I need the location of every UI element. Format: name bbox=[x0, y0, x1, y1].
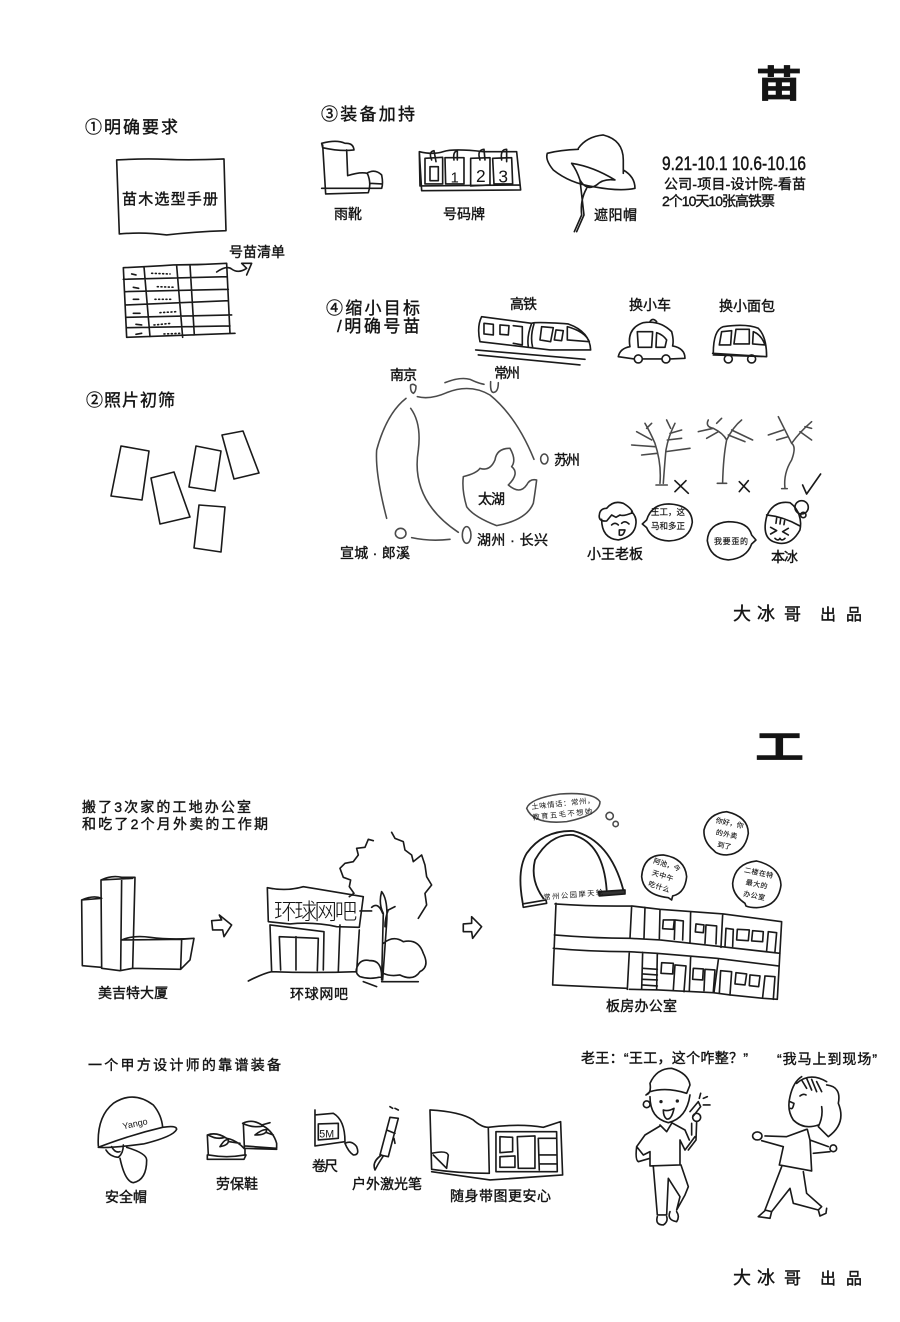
callout: boss Wang with speech bubble bbox=[587, 502, 692, 562]
text block: dates and itinerary: 9.21-10.1 10.6-10.16 bbox=[662, 154, 806, 175]
icon: high speed train: 高铁 bbox=[510, 296, 537, 312]
illustration: designer rushing to site bbox=[753, 1051, 877, 1218]
icon: laser pointer: 户外激光笔 bbox=[352, 1176, 422, 1192]
icon: safety helmet: 安全帽 bbox=[105, 1189, 147, 1205]
icon: sun hat: 遮阳帽 bbox=[594, 207, 637, 223]
icon: safety helmet: Yango bbox=[122, 1116, 149, 1131]
chart: seedling list table bbox=[123, 244, 285, 337]
signature: 哥 bbox=[784, 605, 801, 624]
icon: plant selection handbook bbox=[117, 159, 226, 235]
icon: safety shoes bbox=[207, 1121, 277, 1192]
panel: construction section 工 bbox=[82, 728, 877, 1288]
icon: three candidate trees bbox=[632, 417, 821, 494]
icon: drawings booklet bbox=[430, 1110, 563, 1204]
signature: 品 bbox=[846, 607, 862, 624]
icon: number plates: 1 bbox=[451, 171, 459, 187]
signature bbox=[733, 604, 862, 624]
icon: tape measure: 卷尺 bbox=[312, 1158, 338, 1174]
heading: step 2: ②照片初筛 bbox=[86, 391, 175, 410]
illustration: designer rushing to site: “我马上到现场” bbox=[777, 1051, 877, 1067]
icon: small van: 换小面包 bbox=[719, 298, 775, 314]
icon: number plates: 2 bbox=[476, 166, 486, 186]
callout: boss Wang with speech bubble: 马和多正 bbox=[651, 521, 685, 531]
chart: route map around Taihu: 苏州 bbox=[554, 452, 580, 468]
signature: 出 bbox=[820, 606, 836, 624]
heading: step 4: ④缩小目标 bbox=[326, 299, 420, 318]
callout: speech bubble lunch: 吃什么 bbox=[647, 879, 671, 894]
callout: boss Wang with speech bubble: 小王老板 bbox=[587, 546, 643, 562]
icon: high speed train bbox=[476, 296, 591, 365]
callout: speech bubble takeout: 到了 bbox=[717, 841, 732, 851]
icon: tape measure bbox=[312, 1110, 358, 1174]
icon: tape measure: 5M bbox=[319, 1128, 334, 1140]
callout: speech bubble biggest office: 二楼在特 bbox=[743, 865, 774, 880]
icon: rain boots bbox=[322, 141, 382, 222]
illustration: Lao Wang on the phone bbox=[581, 1050, 748, 1225]
heading: step 4 bbox=[326, 299, 420, 336]
text block: offices intro: 和吃了2个月外卖的工作期 bbox=[82, 816, 268, 832]
heading: designer gear: 一个甲方设计师的靠谱装备 bbox=[88, 1057, 281, 1073]
icon: number plates bbox=[419, 149, 521, 222]
icon: Ferris wheel arch with thought bubble: 教育五毛不想她 bbox=[532, 807, 593, 822]
signature: 冰 bbox=[757, 604, 775, 624]
chart: route map around Taihu: 湖州 · 长兴 bbox=[477, 532, 548, 548]
title: 工: 工 bbox=[755, 728, 804, 766]
arrow bbox=[463, 917, 482, 938]
signature: 冰 bbox=[757, 1268, 775, 1288]
title: 苗: 苗 bbox=[756, 63, 802, 105]
icon: scattered photos bbox=[111, 431, 259, 552]
icon: small van bbox=[713, 298, 775, 363]
callout: speech bubble takeout bbox=[704, 812, 748, 855]
signature: 品 bbox=[846, 1271, 862, 1288]
callout: Benbing with speech bubble bbox=[707, 501, 808, 565]
callout: speech bubble biggest office: 最大的 bbox=[745, 877, 768, 891]
callout: speech bubble biggest office: 办公室 bbox=[743, 889, 766, 902]
icon: internet cafe: 环球网吧 bbox=[290, 986, 348, 1002]
chart: route map around Taihu: 南京 bbox=[390, 367, 417, 383]
icon: sun hat bbox=[547, 135, 637, 232]
callout: Benbing with speech bubble: 我要歪的 bbox=[714, 536, 748, 546]
signature bbox=[733, 1268, 862, 1288]
text block: offices intro bbox=[82, 799, 268, 832]
illustration: Lao Wang on the phone: 老王：“王工，这个咋整？” bbox=[581, 1050, 748, 1066]
icon: internet cafe: 环球网吧 bbox=[274, 898, 357, 924]
text block: dates and itinerary bbox=[662, 154, 806, 209]
icon: Ferris wheel arch with thought bubble: 土味情话：常州， bbox=[531, 796, 595, 811]
signature: 大 bbox=[733, 604, 751, 624]
icon: internet cafe bbox=[248, 832, 432, 1002]
signature: 哥 bbox=[784, 1269, 801, 1288]
signature: 大 bbox=[733, 1268, 751, 1288]
text block: offices intro: 搬了3次家的工地办公室 bbox=[82, 799, 251, 815]
icon: prefab office building bbox=[553, 903, 782, 1014]
chart: route map around Taihu bbox=[340, 365, 580, 561]
arrow bbox=[212, 915, 232, 937]
icon: Meijite building: 美吉特大厦 bbox=[98, 985, 168, 1001]
icon: Ferris wheel arch with thought bubble: 常州公园摩天轮 bbox=[543, 888, 604, 902]
heading: step 3: ③装备加持 bbox=[321, 105, 415, 124]
heading: step 4: /明确号苗 bbox=[337, 317, 420, 336]
callout: speech bubble takeout: 的外卖 bbox=[715, 828, 738, 841]
callout: speech bubble lunch: 天中午 bbox=[651, 868, 675, 883]
icon: number plates: 3 bbox=[498, 167, 508, 187]
signature: 出 bbox=[820, 1270, 836, 1288]
icon: prefab office building: 板房办公室 bbox=[606, 998, 677, 1014]
chart: route map around Taihu: 太湖 bbox=[478, 491, 505, 507]
chart: route map around Taihu: 宣城 · 郎溪 bbox=[340, 545, 410, 561]
text block: dates and itinerary: 2个10天10张高铁票 bbox=[662, 193, 775, 209]
chart: seedling list table: 号苗清单 bbox=[229, 244, 285, 260]
icon: safety shoes: 劳保鞋 bbox=[216, 1176, 258, 1192]
icon: small car bbox=[618, 297, 685, 363]
chart: route map around Taihu: 常州 bbox=[494, 365, 520, 381]
icon: safety helmet bbox=[98, 1097, 177, 1205]
icon: Ferris wheel arch with thought bubble bbox=[520, 794, 625, 907]
callout: Benbing with speech bubble: 本冰 bbox=[771, 549, 798, 565]
icon: Meijite building bbox=[82, 877, 194, 1001]
panel: seedling section 苗 bbox=[85, 63, 862, 624]
callout: boss Wang with speech bubble: 王工，这 bbox=[651, 507, 685, 517]
icon: number plates: 号码牌 bbox=[443, 206, 485, 222]
callout: speech bubble lunch: 阿池，今 bbox=[652, 856, 682, 873]
callout: speech bubble lunch bbox=[642, 855, 687, 900]
callout: speech bubble takeout: 你好，你 bbox=[715, 816, 745, 830]
icon: small car: 换小车 bbox=[629, 297, 671, 313]
icon: plant selection handbook: 苗木选型手册 bbox=[122, 191, 218, 208]
heading: step 1: ①明确要求 bbox=[85, 118, 178, 137]
icon: drawings booklet: 随身带图更安心 bbox=[450, 1188, 551, 1204]
callout: speech bubble biggest office bbox=[733, 861, 781, 908]
icon: laser pointer bbox=[352, 1107, 422, 1192]
icon: rain boots: 雨靴 bbox=[334, 206, 362, 222]
text block: dates and itinerary: 公司-项目-设计院-看苗 bbox=[664, 176, 806, 192]
